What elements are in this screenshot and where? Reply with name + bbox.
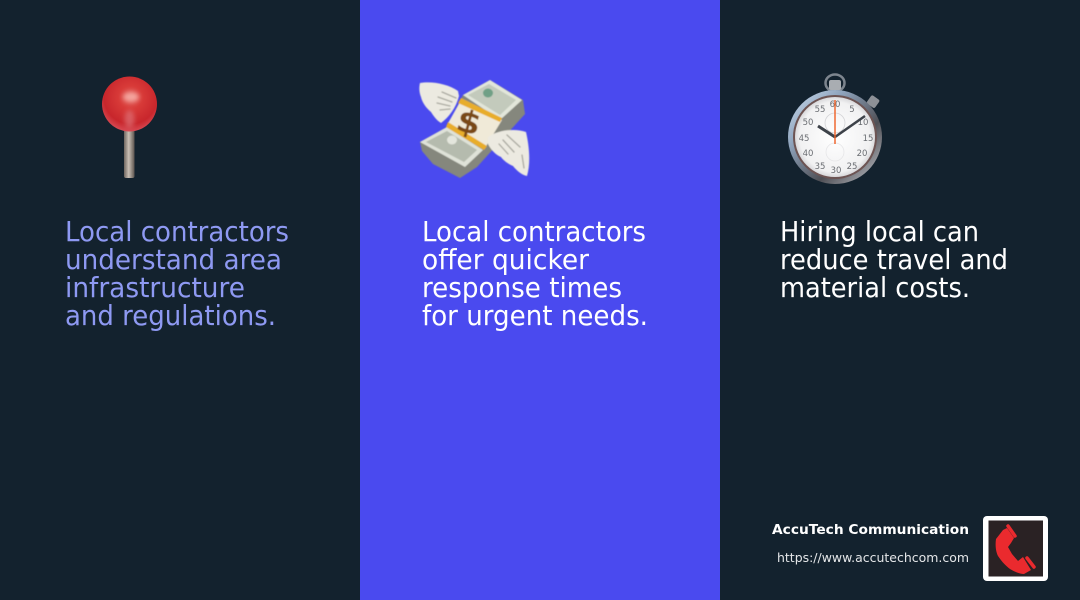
icon: stopwatch: 15 bbox=[863, 134, 873, 144]
text: quick response: offer quicker bbox=[422, 243, 589, 276]
icon: red pushpin bbox=[102, 76, 157, 178]
text: local knowledge: Local contractors bbox=[65, 215, 289, 248]
icon: stopwatch: 50 bbox=[803, 118, 813, 128]
text: quick response: for urgent needs. bbox=[422, 299, 648, 332]
panel: left column bbox=[0, 0, 360, 600]
text: local knowledge: infrastructure bbox=[65, 271, 245, 304]
footer: company name and website: https://www.accutechcom.com bbox=[777, 550, 969, 565]
icon: stopwatch: 10 bbox=[858, 118, 868, 128]
logo: red telephone bbox=[983, 516, 1048, 581]
text: quick response: Local contractors bbox=[422, 215, 646, 248]
bill stack bbox=[420, 80, 525, 178]
right wing bbox=[488, 130, 529, 176]
left wing bbox=[419, 82, 459, 123]
icon: stopwatch: 20 bbox=[857, 149, 867, 159]
text: local knowledge: understand area bbox=[65, 243, 282, 276]
icon: stopwatch: 30 bbox=[831, 166, 841, 176]
text: quick response bbox=[422, 215, 648, 332]
panel: right column bbox=[720, 0, 1080, 600]
text: local knowledge: and regulations. bbox=[65, 299, 276, 332]
icon: stopwatch: 35 bbox=[815, 162, 825, 172]
footer: company name and website: AccuTech Communication bbox=[772, 522, 969, 538]
footer: company name and website bbox=[772, 522, 969, 565]
icon: stopwatch: 25 bbox=[847, 162, 857, 172]
icon: stopwatch: 45 bbox=[799, 134, 809, 144]
text: reduced costs: material costs. bbox=[780, 271, 970, 304]
panel: middle column bbox=[360, 0, 720, 600]
paper band with dollar sign: $ bbox=[452, 102, 485, 143]
text: reduced costs: Hiring local can bbox=[780, 215, 979, 248]
icon: stopwatch: 40 bbox=[803, 149, 813, 159]
icon: stopwatch: 60 bbox=[830, 100, 840, 110]
icon: stopwatch bbox=[788, 74, 882, 184]
text: quick response: response times bbox=[422, 271, 622, 304]
text: reduced costs bbox=[780, 215, 1008, 304]
text: reduced costs: reduce travel and bbox=[780, 243, 1008, 276]
icon: stopwatch: 55 bbox=[815, 105, 825, 115]
icon: money with wings bbox=[419, 80, 529, 178]
text: local knowledge bbox=[65, 215, 289, 332]
icon: stopwatch: 5 bbox=[849, 105, 855, 115]
